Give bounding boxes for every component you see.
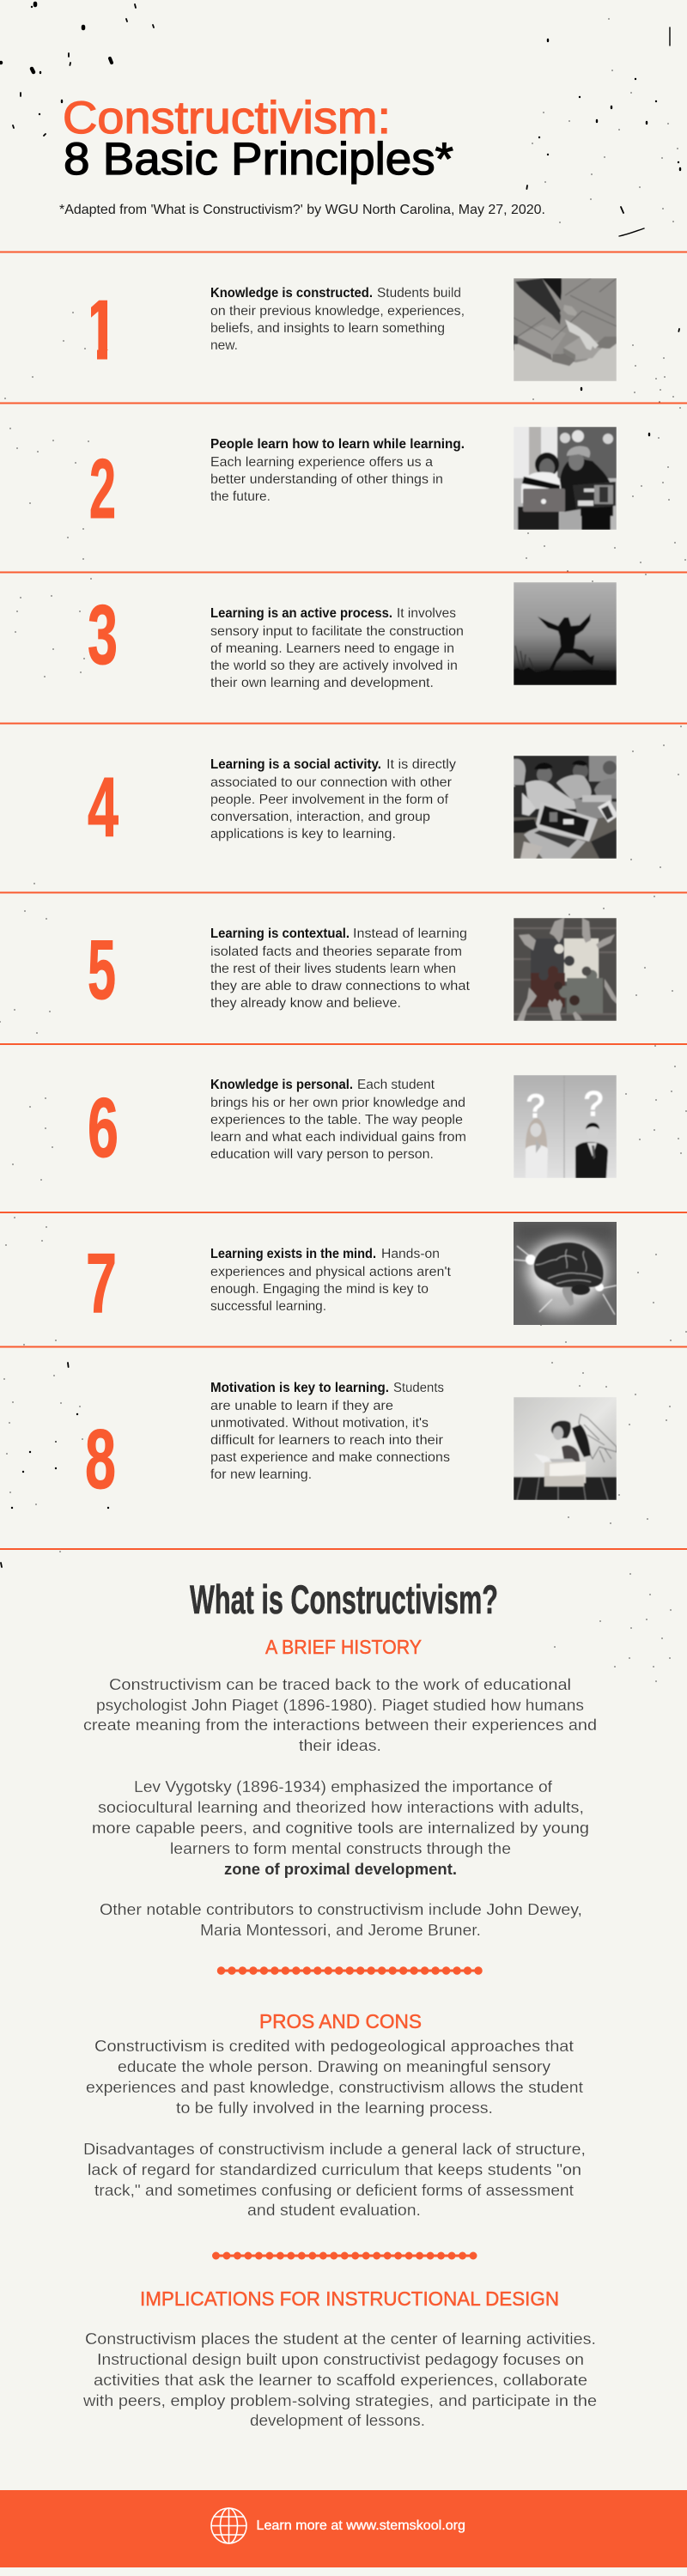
number 5: 5 xyxy=(88,922,116,1017)
icon: globe xyxy=(211,2508,246,2543)
text: learning is contextual: they already know and believe. xyxy=(210,996,401,1011)
text: vygotsky: more capable peers, and cognitive tools are internalized by young xyxy=(92,1820,589,1837)
heading: What is Constructivism? xyxy=(190,1577,498,1622)
text: learning exists in the mind xyxy=(210,1247,452,1314)
title: Constructivism: xyxy=(63,93,391,143)
text: knowledge is personal: Each student xyxy=(357,1078,435,1092)
dotted divider xyxy=(221,1970,480,1971)
text: people learn how to learn xyxy=(210,437,465,504)
text: learning is a social activity: It is directly xyxy=(386,757,456,772)
text: knowledge is personal: brings his or her own prior knowledge and xyxy=(210,1096,465,1110)
text: piaget: create meaning from the interactions between their experiences and xyxy=(83,1716,597,1734)
text: motivation is key to learning xyxy=(210,1381,450,1482)
number 4: 4 xyxy=(88,760,119,854)
text: motivation is key to learning: unmotivated. Without motivation, it's xyxy=(210,1416,429,1431)
text: motivation is key to learning: difficult for learners to reach into their xyxy=(210,1433,443,1448)
text: learning is a social activity: associated to our connection with other xyxy=(210,775,452,790)
title xyxy=(63,93,453,185)
text: motivation is key to learning: Students xyxy=(393,1381,444,1395)
text: people learn how to learn: better understanding of other things in xyxy=(210,472,443,487)
text: knowledge is personal: experiences to the table. The way people xyxy=(210,1113,463,1127)
text: knowledge is constructed xyxy=(210,286,465,353)
panel: principle 2 xyxy=(89,427,617,536)
number 8: 8 xyxy=(85,1412,116,1506)
text: learning is contextual xyxy=(210,927,471,1011)
dotted divider xyxy=(216,2255,475,2257)
text: learning is contextual: Learning is contextual. xyxy=(210,927,350,941)
photo: group of students around a laptop xyxy=(514,756,618,859)
text: learning is an active process: their own learning and development. xyxy=(210,676,434,690)
text: implications xyxy=(82,2330,597,2429)
title: 8 Basic Principles* xyxy=(64,134,453,185)
text: other contributors xyxy=(100,1901,582,1939)
photo: two people with question marks: ? xyxy=(526,1089,544,1125)
text: learning is an active process xyxy=(210,606,464,690)
text: motivation is key to learning: are unable to learn if they are xyxy=(210,1399,393,1413)
text: people learn how to learn: People learn how to learn while learning. xyxy=(210,437,465,452)
text: implications: activities that ask the learner to scaffold experiences, collaborate xyxy=(94,2372,587,2389)
text: pros: to be fully involved in the learning process. xyxy=(176,2099,493,2117)
text: learning is contextual: isolated facts and theories separate from xyxy=(210,945,462,959)
photo: silhouette jumping xyxy=(514,582,617,685)
text: learning is a social activity: applications is key to learning. xyxy=(210,827,396,841)
text: motivation is key to learning: for new learning. xyxy=(210,1467,312,1482)
text: piaget xyxy=(83,1676,597,1754)
text: knowledge is personal xyxy=(210,1078,466,1162)
photo: glowing brain xyxy=(514,1222,617,1325)
text: piaget: psychologist John Piaget (1896-1980). Piaget studied how humans xyxy=(96,1697,584,1714)
text: piaget: their ideas. xyxy=(299,1737,381,1754)
text: knowledge is constructed: Knowledge is constructed. xyxy=(210,286,373,301)
panel: principle 5 xyxy=(88,918,617,1021)
footer link text: Learn more at www.stemskool.org xyxy=(256,2518,465,2533)
text: learning is an active process: sensory input to facilitate the construction xyxy=(210,624,464,639)
text: learning is a social activity: people. Peer involvement in the form of xyxy=(210,793,449,807)
text: learning is contextual: the rest of their lives students learn when xyxy=(210,962,456,976)
text: vygotsky: sociocultural learning and theorized how interactions with adults, xyxy=(98,1799,584,1816)
text: other contributors: Maria Montessori, and Jerome Bruner. xyxy=(200,1922,481,1939)
text: people learn how to learn: Each learning experience offers us a xyxy=(210,455,433,470)
text: knowledge is constructed: Students build xyxy=(377,286,461,301)
text: cons: and student evaluation. xyxy=(247,2202,421,2219)
text: learning is an active process: the world so they are actively involved in xyxy=(210,659,458,673)
text: learning is an active process: Learning is an active process. xyxy=(210,606,392,621)
text: knowledge is constructed: new. xyxy=(210,338,238,353)
text: implications: Constructivism places the student at the center of learning activities. xyxy=(85,2330,596,2348)
text: implications: Instructional design built upon constructivist pedagogy focuses on xyxy=(97,2351,584,2368)
number 7: 7 xyxy=(86,1236,117,1330)
number 3: 3 xyxy=(88,587,118,682)
text: implications: development of lessons. xyxy=(250,2412,425,2429)
footer band xyxy=(0,2490,687,2567)
photo: hands joining puzzle pieces xyxy=(514,918,617,1021)
panel: principle 4 xyxy=(88,756,618,859)
number 6: 6 xyxy=(88,1080,119,1175)
photo: two students with laptops xyxy=(514,427,617,530)
text: cons xyxy=(83,2141,586,2219)
text: learning is a social activity xyxy=(210,757,456,841)
text: cons: Disadvantages of constructivism include a general lack of structure, xyxy=(83,2141,586,2158)
text: learning is an active process: It involves xyxy=(397,606,456,621)
text: motivation is key to learning: past experience and make connections xyxy=(210,1450,450,1465)
text: knowledge is constructed: on their previous knowledge, experiences, xyxy=(210,304,465,319)
text: learning is a social activity: conversation, interaction, and group xyxy=(210,810,430,824)
text: learning exists in the mind: Hands-on xyxy=(381,1247,440,1261)
text: cons: lack of regard for standardized curriculum that keeps students "on xyxy=(88,2161,581,2178)
text: pros: Constructivism is credited with pedogeological approaches that xyxy=(94,2038,574,2055)
text: knowledge is personal: Knowledge is personal. xyxy=(210,1078,353,1092)
text: knowledge is personal: education will vary person to person. xyxy=(210,1147,434,1162)
text: learning is an active process: of meaning. Learners need to engage in xyxy=(210,641,454,656)
panel: principle 1 xyxy=(84,278,617,381)
divider rules xyxy=(0,251,687,1550)
text: pros xyxy=(86,2038,583,2117)
text: motivation is key to learning: Motivation is key to learning. xyxy=(210,1381,389,1395)
photo: two people with question marks: ? xyxy=(584,1085,603,1123)
panel: principle 3 xyxy=(88,582,617,690)
photo: child in cardboard box with rocket drawing xyxy=(514,1397,617,1500)
text: vygotsky: zone of proximal development. xyxy=(224,1861,457,1878)
text: learning exists in the mind: enough. Engaging the mind is key to xyxy=(210,1282,429,1297)
text: learning is contextual: Instead of learning xyxy=(353,927,467,941)
text: learning exists in the mind: experiences and physical actions aren't xyxy=(210,1265,452,1279)
text: learning is contextual: they are able to draw connections to what xyxy=(210,979,471,993)
text: people learn how to learn: the future. xyxy=(210,489,271,504)
text: knowledge is constructed: beliefs, and insights to learn something xyxy=(210,321,445,336)
photo: two people with question marks xyxy=(514,1075,617,1178)
text: knowledge is personal: learn and what each individual gains from xyxy=(210,1130,466,1145)
text: pros: educate the whole person. Drawing on meaningful sensory xyxy=(118,2058,550,2075)
text: learning is a social activity: Learning is a social activity. xyxy=(210,757,381,772)
panel: what is constructivism xyxy=(82,1577,597,2429)
panel: principle 7 xyxy=(86,1222,617,1330)
text: learning exists in the mind: successful learning. xyxy=(210,1299,326,1314)
text: vygotsky xyxy=(92,1778,589,1878)
text: cons: track," and sometimes confusing or deficient forms of assessment xyxy=(94,2182,574,2199)
number 2: 2 xyxy=(89,441,116,536)
subheading: a brief history: A BRIEF HISTORY xyxy=(265,1636,422,1658)
text: piaget: Constructivism can be traced back to the work of educational xyxy=(109,1676,571,1693)
source note: *Adapted from 'What is Constructivism?' by WGU North Carolina, May 27, 2020. xyxy=(59,203,545,217)
panel: principle 6 xyxy=(88,1075,617,1178)
photo: hand placing paving bricks xyxy=(514,278,617,381)
text: vygotsky: Lev Vygotsky (1896-1934) emphasized the importance of xyxy=(134,1778,553,1795)
text: vygotsky: learners to form mental constructs through the xyxy=(170,1840,511,1857)
text: learning exists in the mind: Learning exists in the mind. xyxy=(210,1247,376,1261)
panel: principle 8 xyxy=(85,1381,617,1506)
ink splatter specks xyxy=(0,3,686,1681)
number 1: 1 xyxy=(84,283,119,377)
subheading: implications: IMPLICATIONS FOR INSTRUCTIONAL DESIGN xyxy=(140,2287,559,2310)
subheading: pros and cons: PROS AND CONS xyxy=(259,2010,422,2032)
text: other contributors: Other notable contributors to constructivism include John Dewey, xyxy=(100,1901,582,1918)
text: pros: experiences and past knowledge, constructivism allows the student xyxy=(86,2079,583,2096)
text: implications: with peers, employ problem-solving strategies, and participate in the xyxy=(82,2392,597,2409)
